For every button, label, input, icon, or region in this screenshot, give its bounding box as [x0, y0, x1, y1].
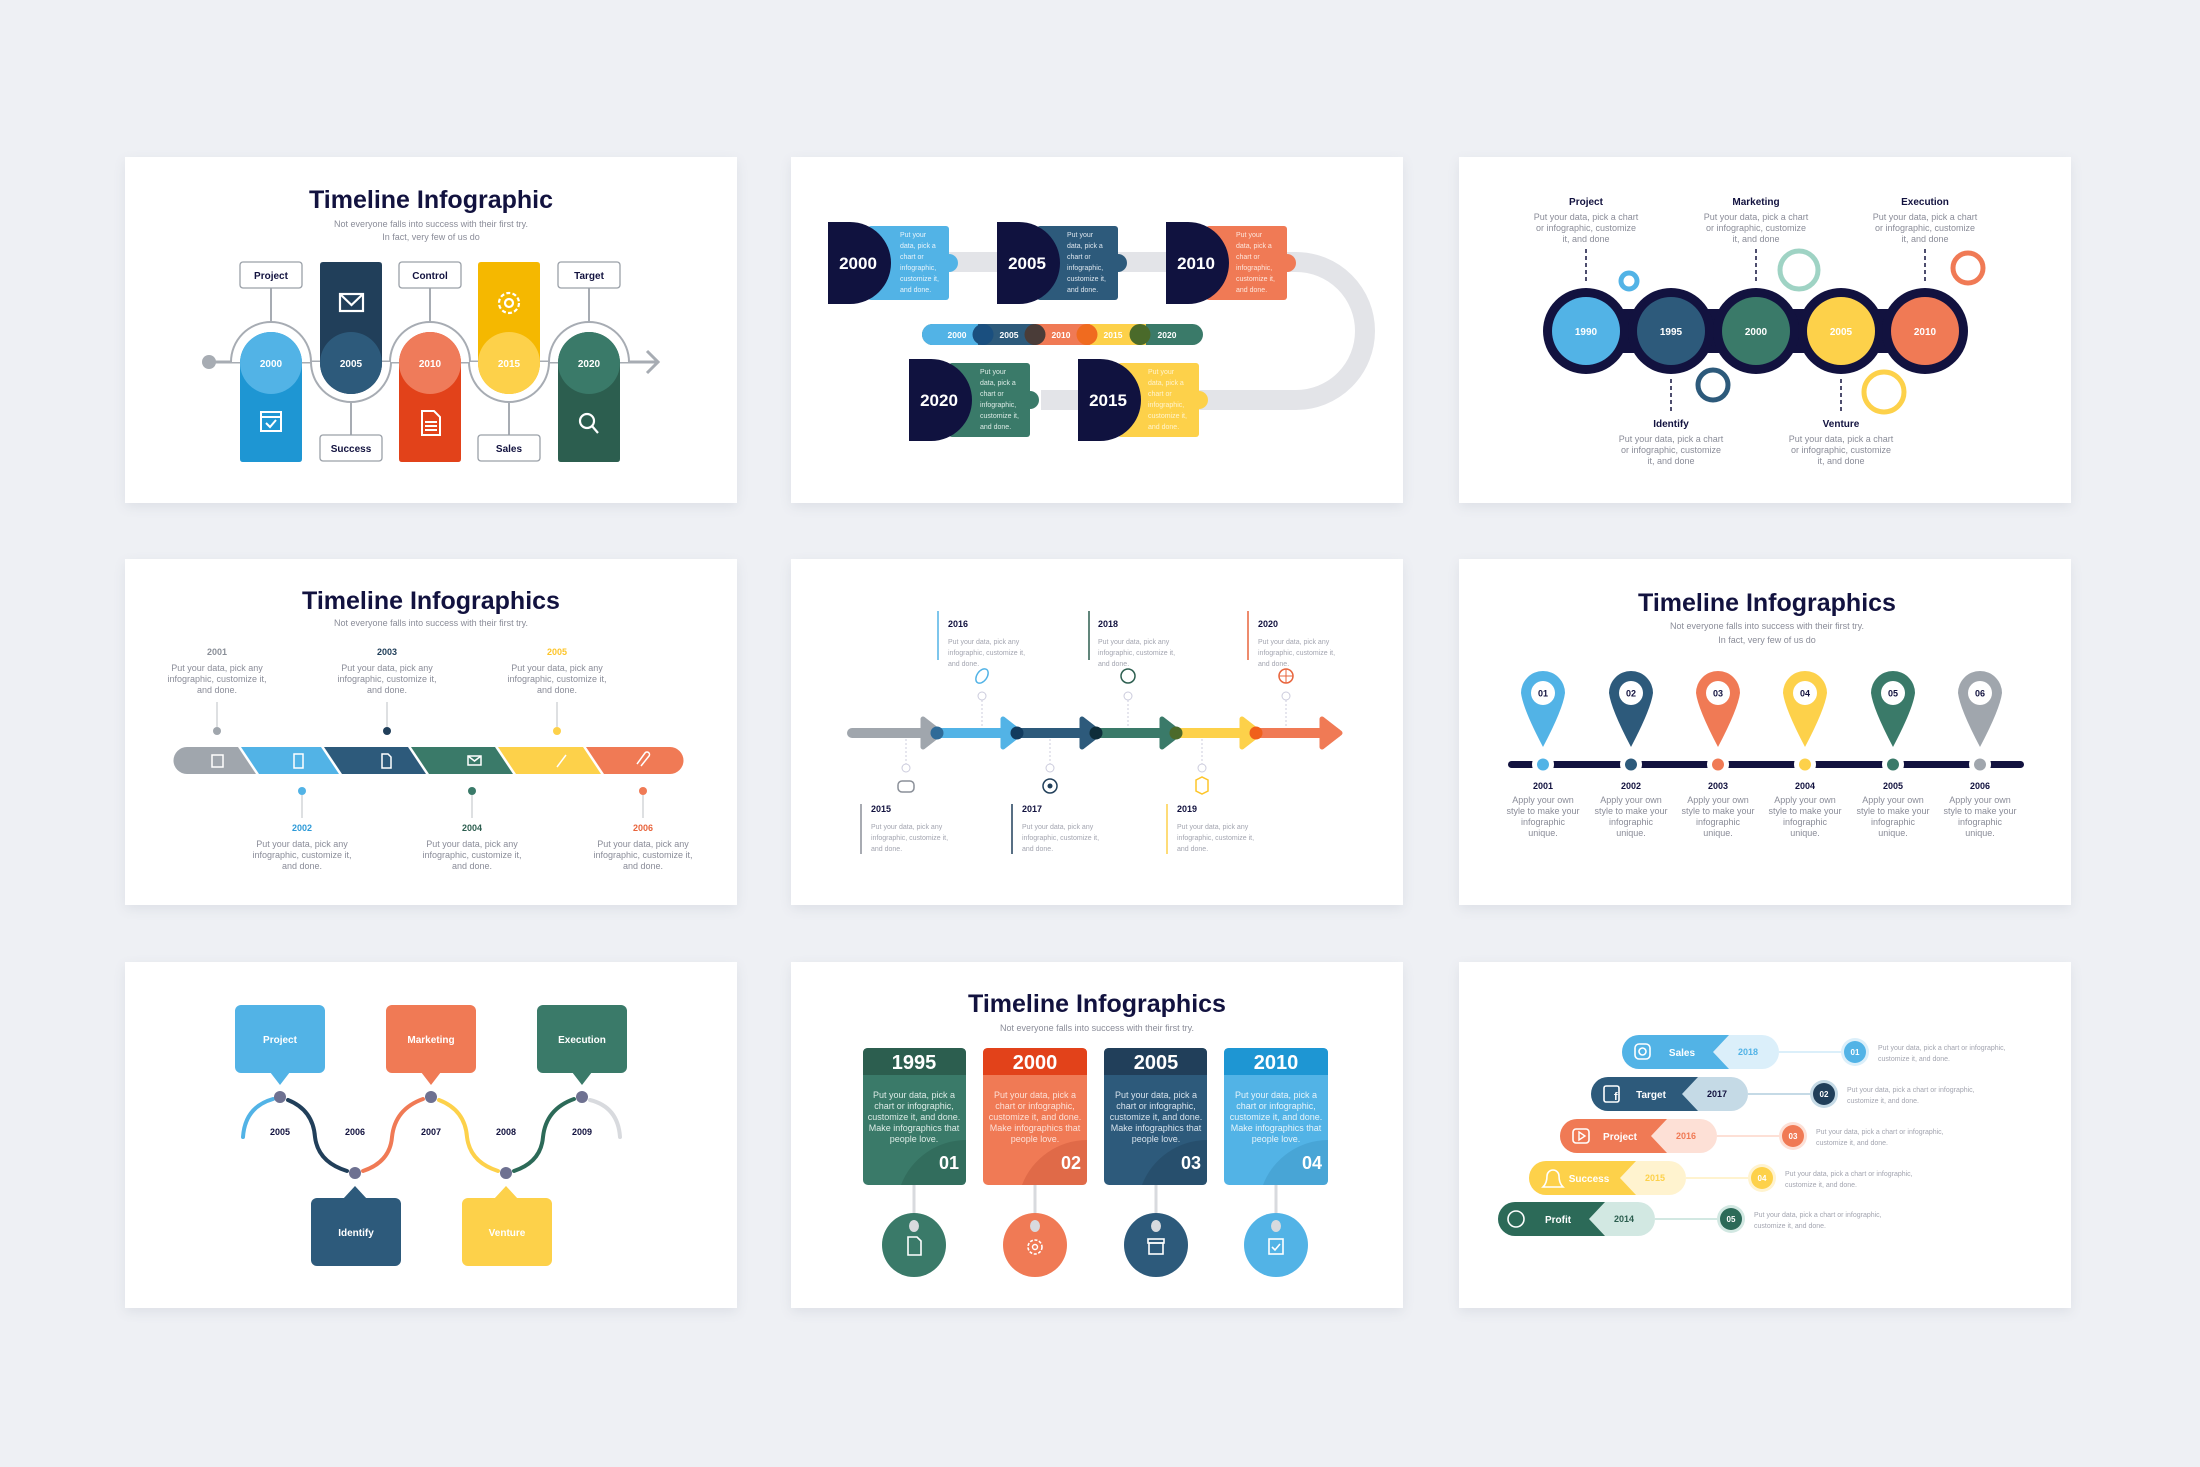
tab: 2020: 2020	[920, 391, 958, 410]
card: 2005: customize it, and done.	[1110, 1112, 1202, 1122]
pillar: 2010 Control: Control	[412, 271, 448, 282]
chain: 1995	[1660, 327, 1683, 338]
card: 2010	[1224, 1048, 1328, 1277]
year labels: unique.	[1703, 828, 1733, 838]
tab: 2005: data, pick a	[1067, 243, 1103, 250]
row: Profit 2014	[1498, 1202, 1882, 1236]
card: 2010: chart or infographic,	[1236, 1101, 1316, 1111]
label: Identify	[1619, 379, 1724, 466]
milestone: 2002: infographic, customize it,	[252, 850, 352, 860]
title: Timeline Infographics	[1638, 589, 1896, 617]
row: Target 2017: customize it, and done.	[1847, 1098, 1919, 1105]
year labels: infographic	[1609, 817, 1654, 827]
milestone: 2020: Put your data, pick any	[1258, 639, 1330, 646]
milestone: 2020: and done.	[1258, 661, 1289, 668]
year labels: infographic	[1958, 817, 2003, 827]
label: Execution	[1873, 197, 1978, 284]
timeline axis	[202, 351, 658, 373]
arrow chain	[852, 719, 1340, 747]
callout: Identify: Identify	[338, 1228, 374, 1239]
card: 2000: people love.	[1011, 1134, 1059, 1144]
milestone: 2006: and done.	[623, 861, 663, 871]
tab: 2010: and done.	[1236, 287, 1267, 294]
panel: staggered social pills	[1459, 962, 2071, 1308]
card: 1995: customize it, and done.	[868, 1112, 960, 1122]
milestone: 2006	[593, 787, 693, 871]
row: Success 2015: Success	[1569, 1174, 1610, 1185]
milestone: 2003: infographic, customize it,	[337, 674, 437, 684]
pins: 02	[1626, 688, 1636, 698]
label: Marketing: Marketing	[1732, 197, 1780, 208]
year labels: Apply your own	[1600, 795, 1662, 805]
card: 2010: customize it, and done.	[1230, 1112, 1322, 1122]
card: 2000: chart or infographic,	[995, 1101, 1075, 1111]
panel: year cards	[791, 962, 1403, 1308]
year pill: 2015	[1104, 330, 1123, 340]
label: Marketing: it, and done	[1732, 234, 1780, 244]
year labels: 2001	[1533, 781, 1553, 791]
card: 2000: 2000	[1013, 1052, 1057, 1074]
tab: 2010: 2010	[1177, 254, 1215, 273]
row: Target 2017	[1591, 1077, 1975, 1111]
milestone: 2017: infographic, customize it,	[1022, 835, 1099, 842]
milestone: 2016	[938, 611, 1025, 727]
segmented bar	[174, 747, 684, 774]
year labels: unique.	[1790, 828, 1820, 838]
tab: 2005: Put your	[1067, 232, 1094, 239]
card: 1995: Make infographics that	[869, 1123, 960, 1133]
label: Project: or infographic, customize	[1536, 223, 1636, 233]
milestone: 2001: and done.	[197, 685, 237, 695]
label: Identify: or infographic, customize	[1621, 445, 1721, 455]
pillar: 2010 Control: 2010	[419, 359, 442, 370]
tab: 2000: and done.	[900, 287, 931, 294]
label: Venture: it, and done	[1817, 456, 1865, 466]
milestone: 2018: 2018	[1098, 619, 1118, 629]
milestone: 2018: Put your data, pick any	[1098, 639, 1170, 646]
year labels: 2006	[1970, 781, 1990, 791]
tab: 2000	[828, 222, 958, 304]
years: 2005	[270, 1127, 290, 1137]
title: Timeline Infographic	[309, 186, 553, 214]
milestone: 2005	[507, 647, 607, 735]
milestone: 2020: 2020	[1258, 619, 1278, 629]
year labels: style to make your	[1594, 806, 1668, 816]
tab: 2015: Put your	[1148, 369, 1175, 376]
milestone: 2004: and done.	[452, 861, 492, 871]
card: 2005: 03	[1181, 1153, 1201, 1173]
tab: 2010: Put your	[1236, 232, 1263, 239]
label: Venture: or infographic, customize	[1791, 445, 1891, 455]
tab: 2000: customize it,	[900, 276, 939, 283]
milestone: 2019	[1167, 739, 1254, 854]
milestone: 2006: infographic, customize it,	[593, 850, 693, 860]
milestone: 2006: Put your data, pick any	[597, 839, 689, 849]
row: Target 2017: Put your data, pick a chart or infographic,	[1847, 1087, 1975, 1094]
tab: 2000: data, pick a	[900, 243, 936, 250]
row: Project 2016: Put your data, pick a chart or infographic,	[1816, 1129, 1944, 1136]
pillar: 2005 Success: 2005	[340, 359, 363, 370]
year labels: style to make your	[1943, 806, 2017, 816]
row: Sales 2018: customize it, and done.	[1878, 1056, 1950, 1063]
milestone: 2004: 2004	[462, 823, 482, 833]
pins: 04	[1800, 688, 1810, 698]
card: 1995: people love.	[890, 1134, 938, 1144]
milestone: 2003: Put your data, pick any	[341, 663, 433, 673]
year labels: style to make your	[1768, 806, 1842, 816]
tab: 2015: infographic,	[1148, 402, 1184, 409]
tab: 2020: chart or	[980, 391, 1004, 398]
milestone: 2002: 2002	[292, 823, 312, 833]
tab: 2010: infographic,	[1236, 265, 1272, 272]
row: Sales 2018: Put your data, pick a chart or infographic,	[1878, 1045, 2006, 1052]
callout: Venture	[462, 1186, 552, 1266]
card: 2005: people love.	[1132, 1134, 1180, 1144]
card: 2005: Put your data, pick a	[1115, 1090, 1197, 1100]
callout: Marketing	[386, 1005, 476, 1085]
row: Sales 2018: 01	[1851, 1048, 1860, 1057]
label: Project: it, and done	[1562, 234, 1610, 244]
pillar: 2010 Control	[390, 262, 470, 462]
milestone: 2015: Put your data, pick any	[871, 824, 943, 831]
years: 2009	[572, 1127, 592, 1137]
year pill: 2005	[1000, 330, 1019, 340]
chain: 1990	[1575, 327, 1598, 338]
subtitle: Not everyone falls into success with their first try.	[1670, 621, 1864, 631]
card: 1995: 1995	[892, 1052, 936, 1074]
label: Venture: Put your data, pick a chart	[1789, 434, 1894, 444]
label: Marketing: Put your data, pick a chart	[1704, 212, 1809, 222]
decorative rings	[1621, 251, 1983, 412]
card: 2000: 02	[1061, 1153, 1081, 1173]
row: Project 2016: 03	[1789, 1132, 1798, 1141]
pillar: 2015 Sales: 2015	[498, 359, 521, 370]
tab: 2005: 2005	[1008, 254, 1046, 273]
year labels	[1506, 781, 2017, 838]
row: Sales 2018	[1622, 1035, 2006, 1069]
subtitle: Not everyone falls into success with their first try.	[334, 618, 528, 628]
callout: Execution	[537, 1005, 627, 1085]
year labels: Apply your own	[1687, 795, 1749, 805]
card: 2005: chart or infographic,	[1116, 1101, 1196, 1111]
milestone: 2005: and done.	[537, 685, 577, 695]
pillar: 2015 Sales: Sales	[496, 444, 523, 455]
milestone: 2019: Put your data, pick any	[1177, 824, 1249, 831]
card: 2000: customize it, and done.	[989, 1112, 1081, 1122]
row: Success 2015: customize it, and done.	[1785, 1182, 1857, 1189]
label: Project	[1534, 197, 1639, 284]
pillar: 2005 Success	[311, 262, 391, 461]
pillar: 2015 Sales	[469, 262, 549, 461]
row: Profit 2014: 05	[1727, 1215, 1736, 1224]
milestone: 2020	[1248, 611, 1335, 727]
year pill	[922, 324, 1203, 345]
row: Sales 2018: Sales	[1669, 1048, 1696, 1059]
milestone: 2003: and done.	[367, 685, 407, 695]
tab: 2010	[1166, 222, 1296, 304]
year labels: unique.	[1965, 828, 1995, 838]
milestone: 2003: 2003	[377, 647, 397, 657]
tab: 2000: chart or	[900, 254, 924, 261]
label: Execution: or infographic, customize	[1875, 223, 1975, 233]
milestone: 2001	[167, 647, 267, 735]
year labels: Apply your own	[1774, 795, 1836, 805]
callout: Project: Project	[263, 1035, 298, 1046]
card: 1995: Put your data, pick a	[873, 1090, 955, 1100]
year labels: infographic	[1521, 817, 1566, 827]
axis line	[1508, 754, 2024, 776]
title: Timeline Infographics	[968, 990, 1226, 1018]
label: Execution: Execution	[1901, 197, 1949, 208]
card: 1995	[863, 1048, 966, 1277]
pins: 06	[1975, 688, 1985, 698]
tab: 2000: Put your	[900, 232, 927, 239]
nodes	[274, 1091, 588, 1179]
milestone: 2016: infographic, customize it,	[948, 650, 1025, 657]
row: Profit 2014: customize it, and done.	[1754, 1223, 1826, 1230]
year labels: Apply your own	[1949, 795, 2011, 805]
tab: 2020: and done.	[980, 424, 1011, 431]
pillar: 2020 Target	[549, 262, 629, 462]
card: 2000	[983, 1048, 1087, 1277]
pillar: 2000 Project: Project	[254, 271, 289, 282]
milestone: 2005: 2005	[547, 647, 567, 657]
milestone: 2015: and done.	[871, 846, 902, 853]
label: Venture: Venture	[1823, 419, 1860, 430]
tab: 2020: data, pick a	[980, 380, 1016, 387]
milestone: 2018: and done.	[1098, 661, 1129, 668]
milestone: 2001: 2001	[207, 647, 227, 657]
tab: 2015: customize it,	[1148, 413, 1187, 420]
milestone: 2002: Put your data, pick any	[256, 839, 348, 849]
pins: 01	[1538, 688, 1548, 698]
tab: 2010: chart or	[1236, 254, 1260, 261]
tab: 2005: customize it,	[1067, 276, 1106, 283]
panel: arrow timeline	[791, 559, 1403, 905]
subtitle	[334, 219, 528, 242]
tab: 2015: chart or	[1148, 391, 1172, 398]
year labels: unique.	[1878, 828, 1908, 838]
pins: 03	[1713, 688, 1723, 698]
tab: 2015: 2015	[1089, 391, 1127, 410]
pins: 05	[1888, 688, 1898, 698]
milestone: 2017: 2017	[1022, 804, 1042, 814]
milestone: 2019: 2019	[1177, 804, 1197, 814]
milestone: 2001: infographic, customize it,	[167, 674, 267, 684]
year labels: 2002	[1621, 781, 1641, 791]
milestone: 2020: infographic, customize it,	[1258, 650, 1335, 657]
years	[270, 1127, 592, 1137]
year pill: 2010	[1052, 330, 1071, 340]
tab: 2005	[997, 222, 1127, 304]
milestone: 2005: infographic, customize it,	[507, 674, 607, 684]
label: Project: Project	[1569, 197, 1604, 208]
years: 2006	[345, 1127, 365, 1137]
tab: 2000: 2000	[839, 254, 877, 273]
tab: 2010: data, pick a	[1236, 243, 1272, 250]
panel: wave with callout boxes	[125, 962, 737, 1308]
pillar: 2000 Project	[231, 262, 311, 462]
milestone: 2002: and done.	[282, 861, 322, 871]
chain: 2005	[1830, 327, 1853, 338]
year labels: infographic	[1871, 817, 1916, 827]
pins	[1521, 671, 2002, 747]
label: Venture	[1789, 379, 1894, 466]
milestone: 2002	[252, 787, 352, 871]
row: Target 2017: Target	[1636, 1090, 1667, 1101]
milestone: 2016: Put your data, pick any	[948, 639, 1020, 646]
year labels: style to make your	[1856, 806, 1930, 816]
card: 2005: 2005	[1134, 1052, 1178, 1074]
subtitle: Not everyone falls into success with their first try.	[1000, 1023, 1194, 1033]
label: Identify: it, and done	[1647, 456, 1695, 466]
title: Timeline Infographics	[302, 587, 560, 615]
milestone: 2015: 2015	[871, 804, 891, 814]
year pill: 2020	[1158, 330, 1177, 340]
milestone: 2016: and done.	[948, 661, 979, 668]
chain: 2000	[1745, 327, 1768, 338]
card: 1995: chart or infographic,	[874, 1101, 954, 1111]
year labels: infographic	[1783, 817, 1828, 827]
callout: Project	[235, 1005, 325, 1085]
row: Project 2016: customize it, and done.	[1816, 1140, 1888, 1147]
card: 2010: 04	[1302, 1153, 1322, 1173]
milestone: 2019: infographic, customize it,	[1177, 835, 1254, 842]
callout: Execution: Execution	[558, 1035, 606, 1046]
year labels: 2004	[1795, 781, 1815, 791]
tab: 2005: chart or	[1067, 254, 1091, 261]
tab: 2020: infographic,	[980, 402, 1016, 409]
milestone: 2017: Put your data, pick any	[1022, 824, 1094, 831]
row: Target 2017: f	[1614, 1091, 1618, 1103]
tab: 2015: data, pick a	[1148, 380, 1184, 387]
panel: map pin timeline	[1459, 559, 2071, 905]
tab: 2005: and done.	[1067, 287, 1098, 294]
row: Success 2015: 2015	[1645, 1173, 1665, 1183]
tab: 2015	[1078, 359, 1208, 441]
chain	[1543, 288, 1968, 374]
panel: bubble chain timeline	[1459, 157, 2071, 503]
subtitle: Not everyone falls into success with their first try.	[334, 219, 528, 229]
panel: timeline with pillars	[125, 157, 737, 503]
chain: 2010	[1914, 327, 1937, 338]
label: Identify: Identify	[1653, 419, 1689, 430]
pillar: 2005 Success: Success	[331, 444, 372, 455]
milestone: 2004	[422, 787, 522, 871]
row: Success 2015: Put your data, pick a chart or infographic,	[1785, 1171, 1913, 1178]
milestone: 2018	[1089, 611, 1175, 727]
callout: Venture: Venture	[489, 1228, 526, 1239]
callout: Marketing: Marketing	[407, 1035, 455, 1046]
card: 1995: 01	[939, 1153, 959, 1173]
row: Profit 2014: 2014	[1614, 1214, 1634, 1224]
milestone: 2006: 2006	[633, 823, 653, 833]
row: Success 2015: 04	[1758, 1174, 1767, 1183]
row: Profit 2014: Put your data, pick a chart or infographic,	[1754, 1212, 1882, 1219]
callout: Identify	[311, 1186, 401, 1266]
year labels: Apply your own	[1512, 795, 1574, 805]
milestone: 2019: and done.	[1177, 846, 1208, 853]
tab: 2000: infographic,	[900, 265, 936, 272]
panel: slanted segment bar	[125, 559, 737, 905]
milestone: 2015: infographic, customize it,	[871, 835, 948, 842]
row: Project 2016: 2016	[1676, 1131, 1696, 1141]
year labels: 2003	[1708, 781, 1728, 791]
card: 2000: Make infographics that	[990, 1123, 1081, 1133]
pillar: 2020 Target: 2020	[578, 359, 601, 370]
milestone: 2016: 2016	[948, 619, 968, 629]
year labels: 2005	[1883, 781, 1903, 791]
years: 2008	[496, 1127, 516, 1137]
tab: 2005: infographic,	[1067, 265, 1103, 272]
tab: 2010: customize it,	[1236, 276, 1275, 283]
milestone: 2004: Put your data, pick any	[426, 839, 518, 849]
subtitle: In fact, very few of us do	[1718, 635, 1816, 645]
gray track	[851, 262, 1365, 400]
year pill: 2000	[948, 330, 967, 340]
card: 2010: 2010	[1254, 1052, 1298, 1074]
year labels: unique.	[1616, 828, 1646, 838]
pillar: 2020 Target: Target	[574, 271, 605, 282]
row: Success 2015	[1529, 1161, 1913, 1195]
row: Target 2017: 2017	[1707, 1089, 1727, 1099]
row: Profit 2014: Profit	[1545, 1215, 1572, 1226]
tab: 2015: and done.	[1148, 424, 1179, 431]
label: Marketing: or infographic, customize	[1706, 223, 1806, 233]
milestone: 2005: Put your data, pick any	[511, 663, 603, 673]
card: 2005: Make infographics that	[1111, 1123, 1202, 1133]
year labels: infographic	[1696, 817, 1741, 827]
milestone: 2015	[861, 739, 948, 854]
year labels: Apply your own	[1862, 795, 1924, 805]
subtitle	[1670, 621, 1864, 645]
years: 2007	[421, 1127, 441, 1137]
milestone: 2018: infographic, customize it,	[1098, 650, 1175, 657]
tab: 2020: customize it,	[980, 413, 1019, 420]
row: Project 2016	[1560, 1119, 1944, 1153]
card: 2010: Make infographics that	[1231, 1123, 1322, 1133]
milestone: 2001: Put your data, pick any	[171, 663, 263, 673]
card: 2000: Put your data, pick a	[994, 1090, 1076, 1100]
card: 2005	[1104, 1048, 1207, 1277]
tab: 2020: Put your	[980, 369, 1007, 376]
year labels: style to make your	[1681, 806, 1755, 816]
subtitle: In fact, very few of us do	[382, 232, 480, 242]
year labels: style to make your	[1506, 806, 1580, 816]
label: Identify: Put your data, pick a chart	[1619, 434, 1724, 444]
milestone: 2003	[337, 647, 437, 735]
wave	[243, 1099, 620, 1171]
label: Marketing	[1704, 197, 1809, 284]
label: Execution: Put your data, pick a chart	[1873, 212, 1978, 222]
card: 2010: Put your data, pick a	[1235, 1090, 1317, 1100]
row: Target 2017: 02	[1820, 1090, 1829, 1099]
row: Project 2016: Project	[1603, 1132, 1638, 1143]
panel: snake timeline with tabs	[791, 157, 1403, 503]
milestone: 2004: infographic, customize it,	[422, 850, 522, 860]
year labels: unique.	[1528, 828, 1558, 838]
tab: 2020	[909, 359, 1039, 441]
row: Sales 2018: 2018	[1738, 1047, 1758, 1057]
milestone: 2017	[1012, 739, 1099, 854]
pillar: 2000 Project: 2000	[260, 359, 283, 370]
label: Project: Put your data, pick a chart	[1534, 212, 1639, 222]
milestone: 2017: and done.	[1022, 846, 1053, 853]
card: 2010: people love.	[1252, 1134, 1300, 1144]
label: Execution: it, and done	[1901, 234, 1949, 244]
